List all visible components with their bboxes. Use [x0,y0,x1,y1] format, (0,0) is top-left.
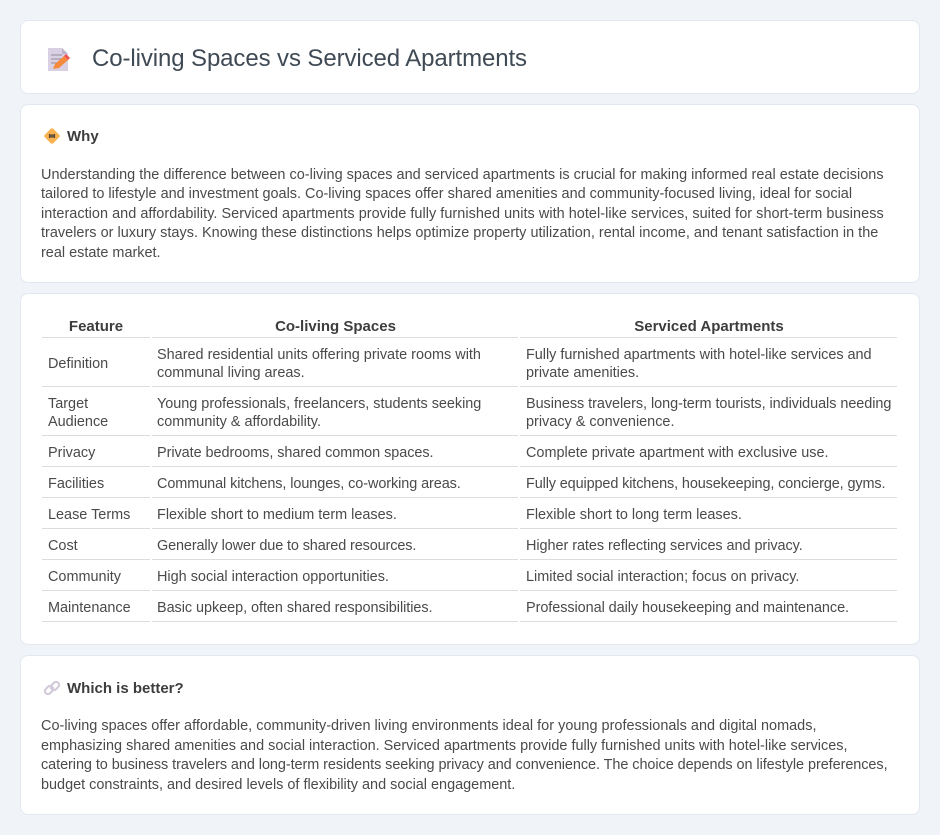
title: Co-living Spaces vs Serviced Apartments [92,45,527,72]
row: cost: Cost [48,538,78,554]
row: definition: communal living areas. [157,365,305,381]
row: privacy [48,445,829,461]
table header row: Serviced Apartments [634,318,784,335]
which is better paragraph: Co-living spaces offer affordable, community-driven living environments ideal for young professionals and digital nomads, [41,718,817,734]
panel: comparison table [20,293,920,645]
heading: which is better: Which is better? [67,680,184,697]
row: maintenance: Maintenance [48,600,131,616]
row: definition: Fully furnished apartments with hotel-like services and [526,347,872,363]
why paragraph: real estate market. [41,244,161,260]
row: community [48,569,799,585]
row: target audience: community & affordability. [157,414,321,430]
heading: why: Why [67,128,99,145]
which is better paragraph: budget constraints, and desired levels of flexibility and social engagement. [41,776,515,792]
row: facilities: Fully equipped kitchens, housekeeping, concierge, gyms. [526,476,885,492]
row: cost: Higher rates reflecting services and privacy. [526,538,803,554]
row: target audience: Target [48,396,88,412]
icon: memo with pencil [48,48,70,71]
table header row: Co-living Spaces [275,318,396,335]
why paragraph: tailored to lifestyle and investment goals. Co-living spaces offer shared amenities and community-focused living, ideal for social [41,186,852,202]
row: maintenance: Basic upkeep, often shared responsibilities. [157,600,432,616]
row: definition: Definition [48,356,108,372]
panel: which is better [20,655,920,815]
panel: title header [20,20,920,94]
row: target audience [48,396,891,430]
row: target audience: Audience [48,414,108,430]
row: target audience: Business travelers, long-term tourists, individuals needing [526,396,891,412]
row: cost: Generally lower due to shared resources. [157,538,416,554]
why paragraph: Understanding the difference between co-living spaces and serviced apartments is crucial for making informed real estate decisions [41,166,884,182]
icon: link [44,680,60,696]
row: lease terms: Flexible short to medium term leases. [157,507,397,523]
which is better paragraph: catering to business travelers and long-term residents seeking privacy and convenience. The choice depends on lifestyle preferences, [41,757,888,773]
row: maintenance: Professional daily housekeeping and maintenance. [526,600,849,616]
row: facilities: Facilities [48,476,104,492]
row: privacy: Complete private apartment with exclusive use. [526,445,829,461]
panel: why [20,104,920,283]
row: lease terms: Flexible short to long term leases. [526,507,742,523]
row: lease terms [48,507,742,523]
which is better paragraph: emphasizing shared amenities and social interaction. Serviced apartments provide fully furnished units with hotel-like services, [41,738,848,754]
row: definition [48,347,872,381]
icon: warning diamond [44,128,60,144]
row: facilities [48,476,885,492]
row: community: Limited social interaction; focus on privacy. [526,569,799,585]
why paragraph: interaction and affordability. Serviced apartments provide fully furnished units with hotel-like services, suited for short-term business [41,206,884,222]
row: community: High social interaction opportunities. [157,569,389,585]
which is better paragraph [41,718,888,792]
row: lease terms: Lease Terms [48,507,130,523]
row: target audience: privacy & convenience. [526,414,674,430]
table header row [69,318,784,335]
table header row: Feature [69,318,123,335]
row: maintenance [48,600,849,616]
row: privacy: Privacy [48,445,95,461]
row: target audience: Young professionals, freelancers, students seeking [157,396,481,412]
row: cost [48,538,803,554]
why paragraph [41,166,884,260]
row: community: Community [48,569,121,585]
row: definition: Shared residential units offering private rooms with [157,347,481,363]
why paragraph: travelers or luxury stays. Knowing these distinctions helps optimize property utilization, rental income, and tenant satisfaction in the [41,225,878,241]
row: facilities: Communal kitchens, lounges, co-working areas. [157,476,461,492]
row: definition: private amenities. [526,365,639,381]
row: privacy: Private bedrooms, shared common spaces. [157,445,434,461]
